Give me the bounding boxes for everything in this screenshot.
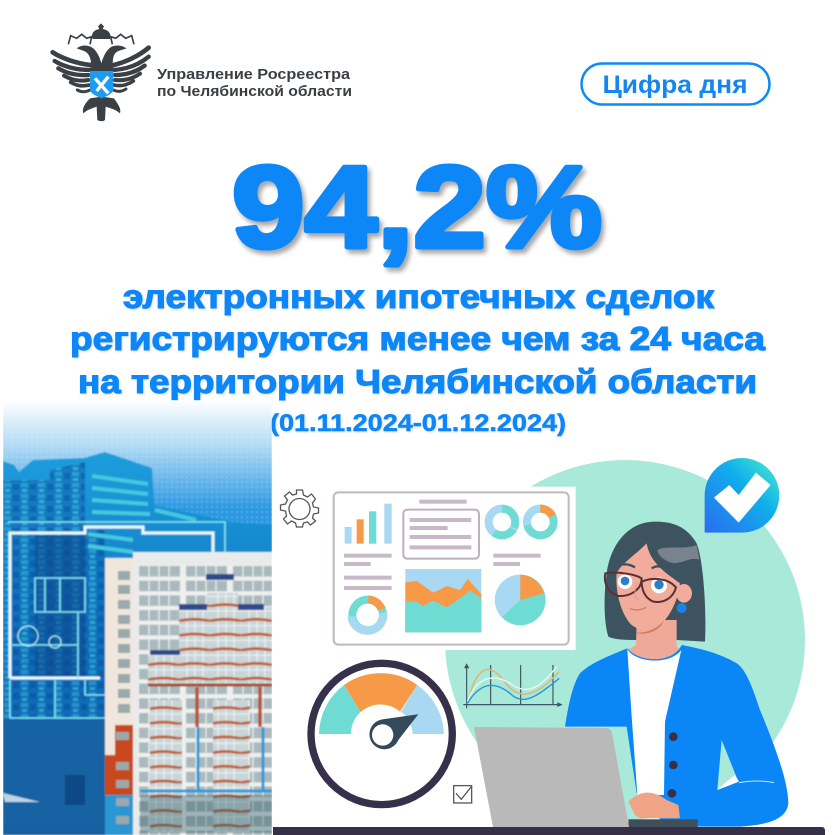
dark lower tower [3, 720, 105, 835]
hair highlight [657, 545, 699, 563]
white shirt [627, 649, 681, 795]
pillars and slabs [197, 687, 260, 727]
logo caption [157, 66, 352, 100]
gauge needle [369, 714, 418, 749]
bar chart [345, 504, 392, 544]
neck [627, 620, 682, 661]
floor plan outline [8, 522, 225, 718]
ear and earring [676, 584, 692, 603]
headline text: регистрируются менее чем за 24 часа [70, 320, 766, 357]
headline text: на территории Челябинской области [78, 363, 757, 400]
left wing feathers [53, 48, 149, 92]
tower window mosaic [3, 462, 105, 720]
desk [273, 827, 825, 835]
icon: checkbox [454, 786, 472, 803]
glasses and eyes [605, 564, 676, 610]
elbow gap [717, 740, 738, 790]
date range: (01.11.2024-01.12.2024) [270, 410, 566, 437]
shield [90, 71, 113, 98]
logo caption: по Челябинской области [157, 83, 352, 100]
eagle heads and necks [77, 45, 127, 71]
front building [105, 552, 272, 835]
headline text [70, 278, 766, 400]
logo: eagle emblem [53, 23, 149, 121]
laptop [474, 727, 629, 827]
headline number: 94,2% [232, 142, 602, 272]
cardigan [565, 645, 788, 827]
blue tower silhouette [3, 452, 272, 835]
area chart [405, 569, 481, 632]
hand [628, 793, 680, 818]
balconies with orange slabs [207, 593, 238, 607]
icon: gear [280, 490, 318, 527]
logo caption: Управление Росреестра [157, 66, 351, 83]
gauge [311, 663, 452, 805]
woman at laptop [565, 522, 788, 827]
mint circle backdrop [445, 460, 805, 820]
headline text: электронных ипотечных сделок [123, 278, 715, 315]
tail and legs [83, 97, 120, 121]
dashboard panel [274, 487, 576, 650]
photo panel: apartment buildings [3, 400, 272, 835]
crowns [92, 23, 110, 39]
buttons [668, 732, 678, 798]
face [616, 543, 680, 630]
donut charts [351, 509, 554, 631]
pie chart [495, 575, 546, 625]
line chart [463, 663, 563, 708]
badge: Цифра дня: Цифра дня [602, 71, 748, 99]
text lines placeholders [344, 500, 541, 590]
keyboard [628, 819, 698, 827]
hair back [605, 522, 705, 642]
icon: check badge [705, 458, 779, 533]
badge: Цифра дня [582, 64, 770, 104]
tower floors [88, 476, 196, 552]
text card [403, 510, 479, 559]
